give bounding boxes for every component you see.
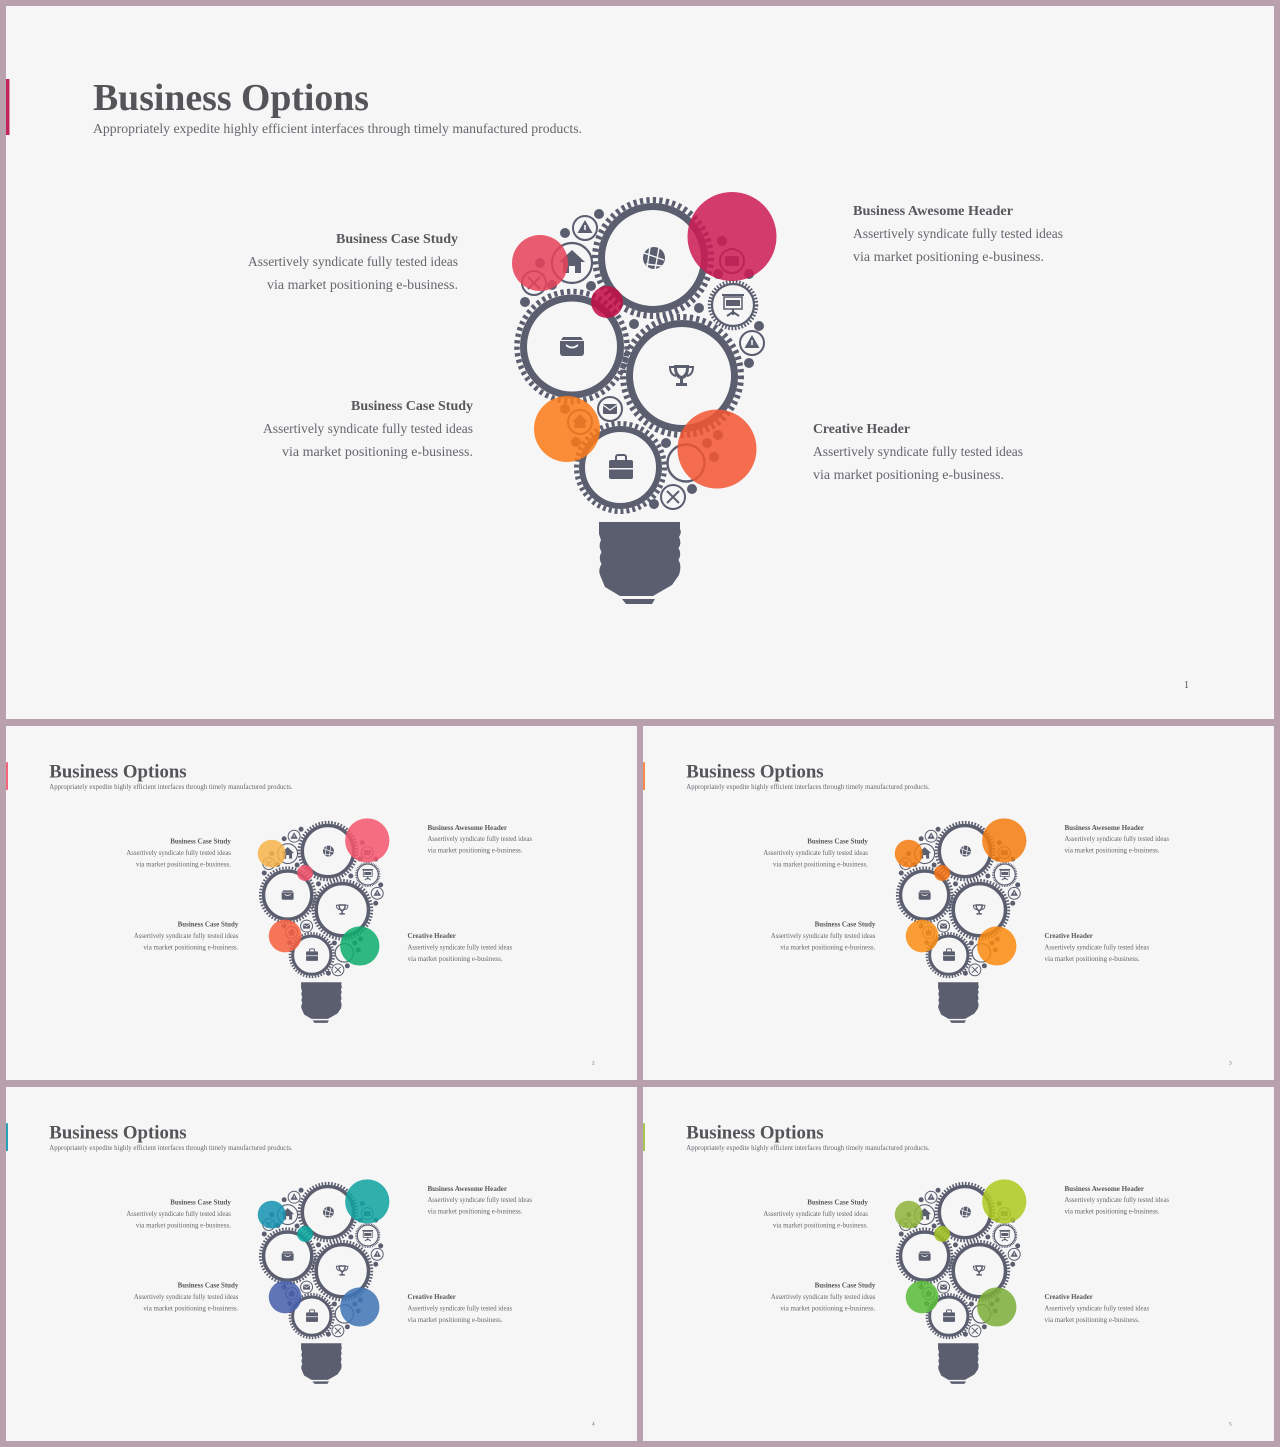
text block: top left: via market positioning e-business. [773, 861, 868, 869]
accent bar [6, 762, 8, 790]
text block: top left: Business Case Study [170, 1199, 231, 1207]
text block: top left [126, 1199, 231, 1230]
panel: slide 5 [643, 1087, 1274, 1441]
text block: bottom right [1045, 932, 1149, 963]
text block: top right: Business Awesome Header [427, 1185, 507, 1193]
text block: bottom left: via market positioning e-business. [282, 445, 473, 460]
text block: top left: Assertively syndicate fully tested ideas [763, 849, 868, 857]
colour circles [895, 1179, 1026, 1327]
text block: top right: Business Awesome Header [1064, 1185, 1144, 1193]
gear: small presentation [710, 282, 756, 328]
text block: bottom left: via market positioning e-business. [143, 943, 239, 951]
text block: top right: via market positioning e-business. [853, 250, 1044, 265]
icon: alert top [573, 216, 597, 240]
text block: bottom left: Business Case Study [815, 921, 876, 929]
circle: red [512, 235, 568, 291]
page number: 2 [592, 1062, 595, 1067]
text block: bottom left [134, 1282, 239, 1312]
icon: home [552, 243, 592, 283]
text block: top left: Assertively syndicate fully tested ideas [763, 1210, 868, 1218]
text block: top right: Business Awesome Header [853, 204, 1013, 219]
icon: tray [560, 337, 584, 356]
gear: left [517, 292, 627, 402]
text block: bottom left [771, 921, 876, 951]
text block: bottom left: Business Case Study [815, 1282, 876, 1290]
text block: bottom right: Assertively syndicate fully tested ideas [1045, 1304, 1149, 1312]
text block: bottom left: via market positioning e-business. [780, 1304, 876, 1312]
text block: top right: Business Awesome Header [427, 824, 507, 832]
text block: top left [126, 838, 231, 869]
text block: bottom right: via market positioning e-business. [408, 955, 503, 963]
light bulb of gears [897, 1183, 1020, 1384]
icon: badge in pink circle [720, 249, 744, 273]
text block: bottom right: Assertively syndicate fully tested ideas [813, 445, 1023, 460]
text block: bottom left: Assertively syndicate fully tested ideas [263, 422, 473, 437]
text block: bottom right: Creative Header [813, 422, 910, 437]
text block: bottom right: Creative Header [408, 1293, 456, 1301]
page number: 4 [592, 1423, 595, 1428]
text block: top left: Business Case Study [807, 1199, 868, 1207]
text block: bottom right: Assertively syndicate fully tested ideas [1045, 943, 1149, 951]
text block: top right: via market positioning e-business. [427, 1208, 523, 1216]
connector dots [520, 209, 764, 509]
text block: bottom left: Assertively syndicate fully tested ideas [771, 932, 876, 940]
text block: top left: via market positioning e-business. [136, 861, 231, 869]
text block: bottom right [408, 932, 512, 963]
text block: bottom left: via market positioning e-business. [780, 943, 876, 951]
text block: top left: Assertively syndicate fully tested ideas [126, 849, 231, 857]
icon: tools left [522, 271, 546, 295]
text block: bottom left: via market positioning e-business. [143, 1304, 239, 1312]
text block: bottom right: Assertively syndicate fully tested ideas [408, 943, 512, 951]
text block: top left [763, 838, 868, 869]
panel: slide 4 [6, 1087, 637, 1441]
circle: coral [678, 410, 756, 488]
subtitle: Appropriately expedite highly efficient interfaces through timely manufactured products. [686, 1144, 930, 1152]
accent bar [6, 79, 10, 135]
text block: bottom right [1045, 1293, 1149, 1324]
text block: top left [248, 232, 458, 293]
subtitle: Appropriately expedite highly efficient interfaces through timely manufactured products. [93, 122, 582, 137]
icon: mail [598, 397, 622, 421]
title: Business Options [686, 1123, 824, 1144]
icon: trophy [670, 365, 693, 386]
title: Business Options [49, 762, 187, 783]
text block: top right: Assertively syndicate fully tested ideas [1064, 1196, 1169, 1204]
text block: top right [427, 1185, 532, 1216]
text block: bottom right: Creative Header [1045, 932, 1093, 940]
text block: bottom right: via market positioning e-business. [408, 1316, 503, 1324]
text block: bottom left: Assertively syndicate fully tested ideas [134, 932, 239, 940]
text block: top left: Assertively syndicate fully tested ideas [126, 1210, 231, 1218]
light bulb of gears [897, 822, 1020, 1023]
text block: bottom left: Business Case Study [351, 399, 473, 414]
text block: top right [1064, 1185, 1169, 1216]
text block: bottom left: Business Case Study [178, 921, 239, 929]
circle: pink [688, 192, 776, 281]
page number: 5 [1229, 1423, 1232, 1428]
text block: bottom left: Assertively syndicate fully tested ideas [771, 1293, 876, 1301]
light bulb of gears [260, 1183, 383, 1384]
text block: top right [853, 204, 1063, 265]
title: Business Options [686, 762, 824, 783]
text block: top right: via market positioning e-business. [427, 847, 523, 855]
text block: top right: Assertively syndicate fully tested ideas [853, 227, 1063, 242]
colour circles [258, 818, 389, 966]
text block: bottom left: Business Case Study [178, 1282, 239, 1290]
text block: top right: via market positioning e-business. [1064, 1208, 1160, 1216]
text block: bottom left: Assertively syndicate fully tested ideas [134, 1293, 239, 1301]
subtitle: Appropriately expedite highly efficient interfaces through timely manufactured products. [49, 783, 293, 791]
icon: home in orange circle [568, 410, 592, 434]
gear: bottom [576, 424, 664, 512]
colour circles [895, 818, 1026, 966]
text block: top left: via market positioning e-business. [267, 278, 458, 293]
gear: top [595, 200, 711, 316]
text block: bottom left [771, 1282, 876, 1312]
colour circles [512, 192, 776, 488]
icon: briefcase [609, 455, 633, 479]
text block: top right: Assertively syndicate fully tested ideas [427, 1196, 532, 1204]
panel: slide 3 [643, 726, 1274, 1080]
text block: bottom right: Creative Header [408, 932, 456, 940]
subtitle: Appropriately expedite highly efficient interfaces through timely manufactured products. [49, 1144, 293, 1152]
accent bar [643, 762, 645, 790]
text block: bottom right [408, 1293, 512, 1324]
title: Business Options [49, 1123, 187, 1144]
page number: 3 [1229, 1062, 1232, 1067]
text block: top right [1064, 824, 1169, 855]
text block: top left: Business Case Study [336, 232, 458, 247]
subtitle: Appropriately expedite highly efficient interfaces through timely manufactured products. [686, 783, 930, 791]
text block: top left: Business Case Study [807, 838, 868, 846]
icon: presentation [722, 294, 744, 316]
circle: orange [534, 396, 600, 462]
text block: bottom left [134, 921, 239, 951]
text block: top left: Assertively syndicate fully tested ideas [248, 255, 458, 270]
text block: top left: via market positioning e-business. [136, 1222, 231, 1230]
colour circles [258, 1179, 389, 1327]
icon: alert right [740, 331, 764, 355]
bulb base [599, 522, 681, 604]
circle: crimson [591, 286, 623, 318]
text block: top right [427, 824, 532, 855]
text block: top right: Assertively syndicate fully tested ideas [1064, 835, 1169, 843]
panel: slide 2 [6, 726, 637, 1080]
light bulb of gears [260, 822, 383, 1023]
text block: bottom right: via market positioning e-business. [813, 468, 1004, 483]
icon: globe [643, 247, 665, 270]
text block: bottom right: Assertively syndicate fully tested ideas [408, 1304, 512, 1312]
text block: top left: via market positioning e-business. [773, 1222, 868, 1230]
text block: top left: Business Case Study [170, 838, 231, 846]
text block: bottom right: via market positioning e-business. [1045, 1316, 1140, 1324]
text block: top left [763, 1199, 868, 1230]
icon: tools bottom [661, 485, 685, 509]
text block: bottom right: via market positioning e-business. [1045, 955, 1140, 963]
page number: 1 [1184, 680, 1189, 691]
text block: top right: Business Awesome Header [1064, 824, 1144, 832]
accent bar [6, 1123, 8, 1151]
accent bar [643, 1123, 645, 1151]
light bulb of gears [517, 200, 764, 604]
text block: bottom right [813, 422, 1023, 483]
text block: top right: Assertively syndicate fully tested ideas [427, 835, 532, 843]
panel: main slide [6, 6, 1274, 719]
gear: right [623, 317, 741, 435]
icon: empty ring [668, 444, 704, 482]
text block: bottom right: Creative Header [1045, 1293, 1093, 1301]
title: Business Options [93, 77, 369, 119]
text block: bottom left [263, 399, 473, 460]
text block: top right: via market positioning e-business. [1064, 847, 1160, 855]
